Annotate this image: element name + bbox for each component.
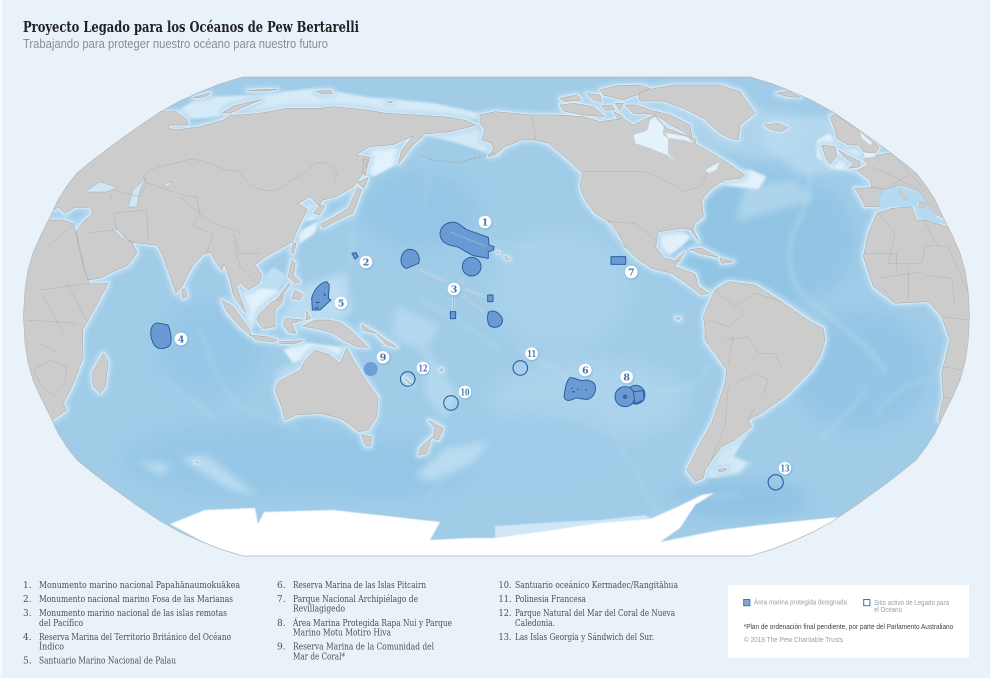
marker 5 [335,297,347,309]
marker 8 [620,371,633,383]
legend label: designated protected area: Área marina protegida designada [754,598,847,606]
marker 12 [417,362,429,374]
Aleutian islands [420,153,495,163]
European shelf [816,133,862,172]
marker 1: 1 [482,217,488,228]
site list column 1: Índico [39,641,64,653]
marker 11: 11 [527,349,536,360]
site list column 2: 6. [277,581,286,591]
page edge strip [0,0,2,678]
protected area 9 Coral Sea [364,362,378,376]
marker 13 [779,462,791,475]
site list column 1: Santuario Marino Nacional de Palau [39,657,176,667]
site list column 3: Las Islas Georgia y Sándwich del Sur. [515,632,654,643]
subtitle: Trabajando para proteger nuestro océano para nuestro futuro [23,37,328,51]
marker 7 [625,266,638,278]
marker 4: 4 [178,334,185,345]
marker 3 [448,283,460,295]
marker 13: 13 [780,464,790,475]
ocean base [50,77,948,543]
Eurasia [0,89,476,313]
world map [0,70,990,562]
site list column 1: Monumento marino nacional Papahānaumokuākea [39,581,241,591]
site list column 1: 1. [23,581,32,591]
protected area 7 Revillagigedo [611,257,626,264]
site list column 3: Caledonia. [515,619,555,629]
protected area 8 Rapa Nui and Motu Motiro Hiva [615,385,645,407]
site list column 3: 13. [498,633,512,643]
inland seas [85,117,941,248]
Siberian Arctic shelf [175,88,482,120]
marker 12: 12 [418,363,428,374]
legend label: active site: el Océano [874,607,902,614]
title: Proyecto Legado para los Océanos de Pew Bertarelli [23,18,359,36]
site list column 2: 7. [277,595,286,605]
marker 3: 3 [451,284,457,295]
site list column 1: 3. [23,609,32,619]
site list column 1: Monumento nacional marino Fosa de las Marianas [39,595,233,605]
site list column 3: 10. [498,581,512,591]
legend footnote: *Plan de ordenación final pendiente, por parte del Parlamento Australiano [744,624,953,631]
ocean ridges [524,178,886,514]
Sunda shelf [242,266,344,364]
Europe and Africa east half [818,111,970,424]
map outline [24,77,970,556]
protected area 2 Marianas Trench [352,253,358,259]
site list column 2: Área Marina Protegida Rapa Nui y Parque [292,617,452,629]
site list column 2 [277,581,452,662]
marker 2 [360,256,372,268]
marker 4 [175,333,187,345]
East China and Yellow seas [298,220,320,245]
site list column 2: Reserva Marina de las Islas Pitcairn [293,581,426,591]
protected area 6 Pitcairn [564,378,596,400]
active site circles 10 to 13 [400,361,783,490]
site list column 1: 2. [23,595,32,605]
numbered map markers [175,216,791,475]
site list column 1: Reserva Marina del Territorio Británico del Océano [39,632,231,643]
legend swatch: active site [864,600,870,606]
site list column 1: 4. [23,633,32,643]
connector lines for marker 3 [420,269,483,312]
site list column 1 [23,581,241,667]
Newfoundland banks and North American east coast [658,168,767,257]
site list column 3: Parque Natural del Mar del Coral de Nueva [515,609,676,619]
country borders [27,115,968,467]
site list column 3: 12. [498,609,512,619]
site list column 1: Monumento marino nacional de las islas remotas [39,609,227,619]
marker 9 [377,351,389,364]
Southeast Asian islands and New Guinea [222,260,397,347]
marker 10 [459,386,471,398]
Canadian Arctic and Greenland [560,85,755,140]
site list column 3: Santuario oceánico Kermadec/Rangitāhua [515,580,679,591]
ocean depth shading [120,170,930,520]
site list column 1: 5. [23,657,32,667]
marker 6 [579,364,592,376]
Africa west half and Madagascar [24,216,112,424]
marker 9: 9 [380,353,387,364]
marker 6: 6 [582,365,589,376]
protected areas 3 Pacific Remote Islands [401,249,502,327]
site list column 3: Polinesia Francesa [515,595,587,605]
site list column 3: 11. [498,595,512,605]
site list column 2: 8. [277,619,286,629]
continents [0,85,990,482]
legend swatch: designated protected area [744,600,750,606]
shallow shelves [138,95,860,495]
marker 11 [525,347,538,360]
Okhotsk and Bering seas [368,146,400,178]
protected area 4 British Indian Ocean [151,323,171,348]
marker 1 [479,216,491,228]
site list column 2: 9. [277,643,286,653]
copyright: © 2018 The Pew Charitable Trusts [744,636,843,644]
marker 2: 2 [363,257,369,268]
marker 10: 10 [460,387,470,398]
site list column 3 [498,580,679,643]
site list column 2: Parque Nacional Archipiélago de [293,594,418,605]
legend panel [728,585,969,658]
Patagonian shelf [706,434,752,479]
legend label: active site: Sitio activo de Legado para [874,600,949,607]
protected area 5 Palau [312,282,331,310]
site list column 1: del Pacífico [39,618,83,629]
North and South America [480,91,825,482]
bright coastal shelves [175,88,880,480]
site list column 2: Revillagigedo [293,605,345,615]
Australia New Zealand and Pacific islands [195,348,443,464]
marker 8: 8 [623,372,630,383]
site list column 2: Reserva Marina de la Comunidad del [293,643,434,653]
site list column 2: Marino Motu Motiro Hiva [293,629,392,639]
site list column 2: Mar de Coral* [293,652,345,662]
marker 7: 7 [628,267,635,278]
marker 5: 5 [338,298,344,309]
Antarctica ice [170,493,838,562]
protected area 1 Papahanaumokuakea [440,222,494,258]
